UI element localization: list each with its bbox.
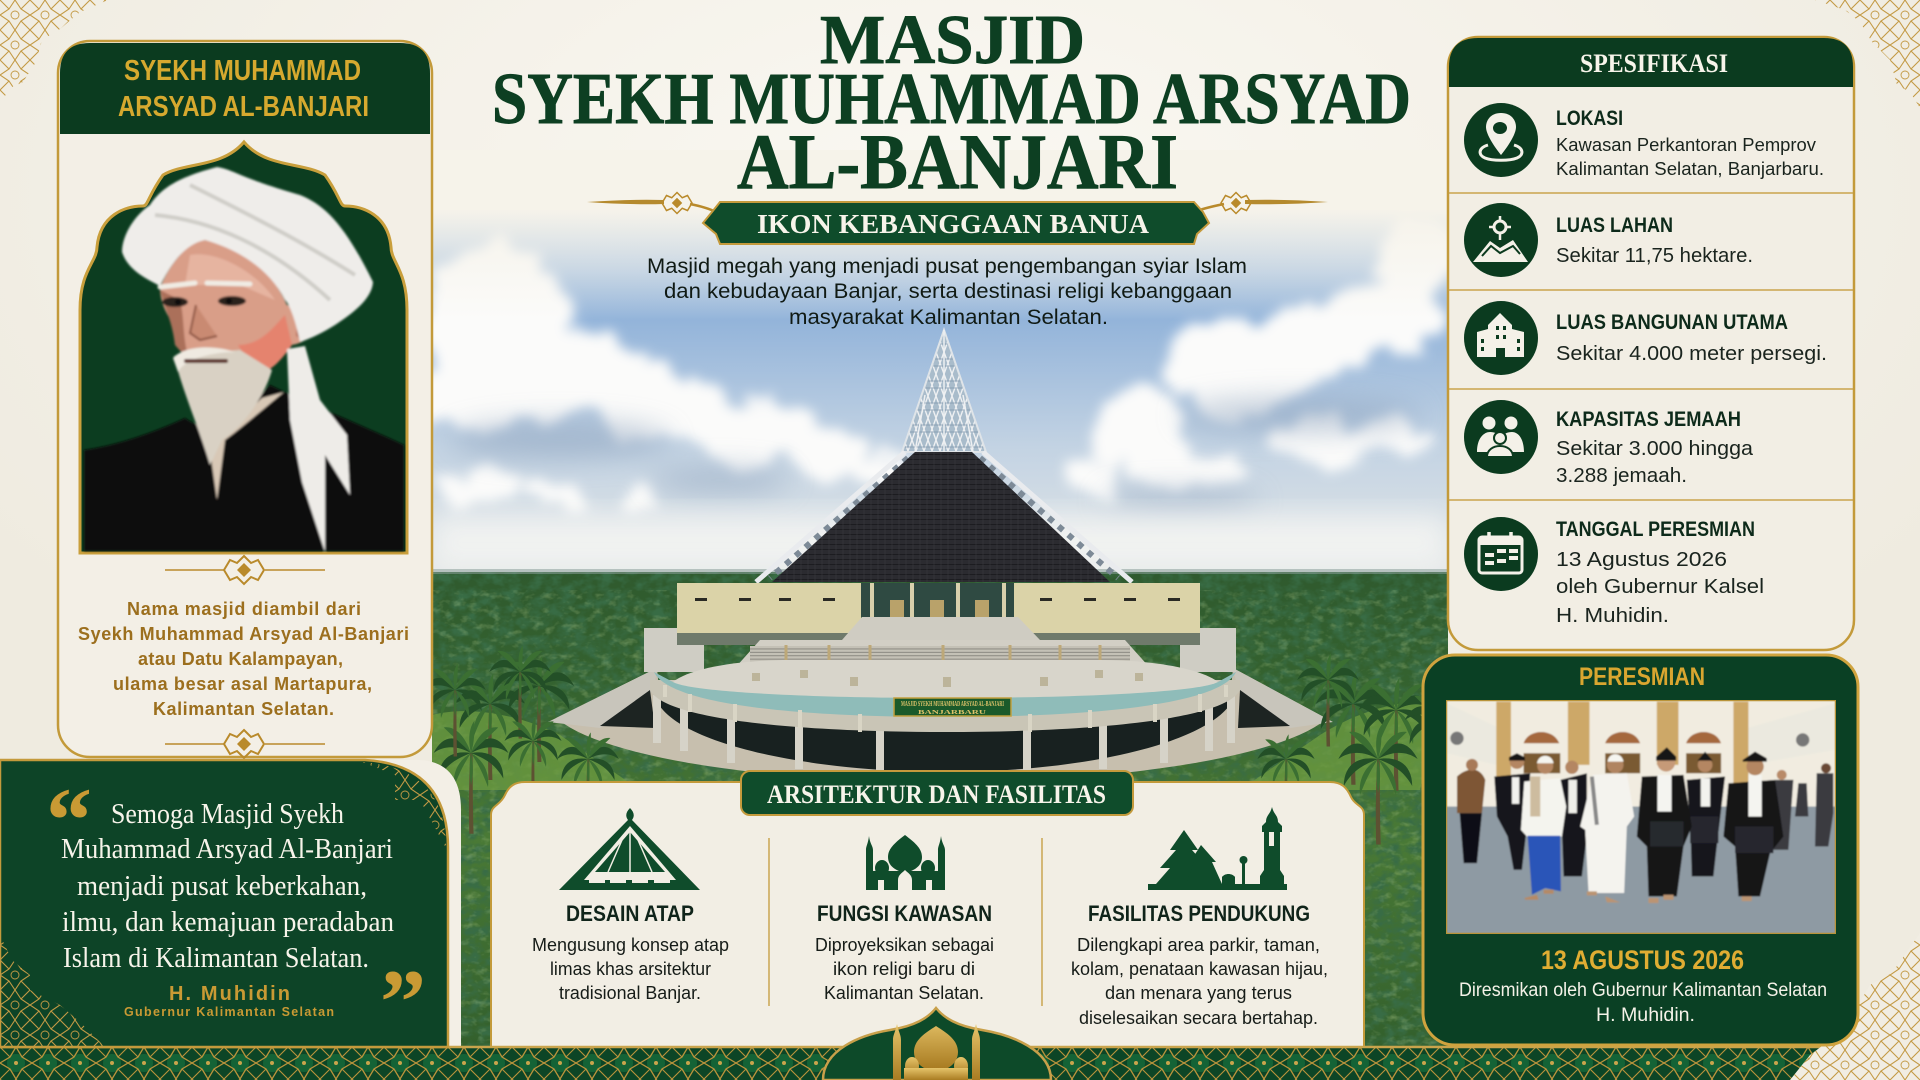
row: Kapasitas Jemaah xyxy=(1464,400,1754,487)
quote text: Semoga Masjid Syekh xyxy=(111,798,344,830)
panel: Spesifikasi xyxy=(1448,37,1854,650)
row: Luas Lahan: LUAS LAHAN xyxy=(1556,214,1673,237)
moustache and mouth xyxy=(173,347,235,372)
caption: ulama besar asal Martapura, xyxy=(113,674,372,694)
row: Kapasitas Jemaah: 3.288 jemaah. xyxy=(1556,465,1687,487)
row: Tanggal Peresmian: TANGGAL PERESMIAN xyxy=(1556,518,1755,541)
decorative corner: bottom right lattice xyxy=(1790,940,1920,1080)
column: Desain Atap: DESAIN ATAP xyxy=(566,901,694,926)
top ornament divider xyxy=(165,556,325,584)
roof xyxy=(756,452,1132,582)
opening quote mark: “ xyxy=(46,769,92,871)
caption xyxy=(78,599,409,719)
under-plaza colonnade xyxy=(654,692,1236,772)
face xyxy=(160,240,316,372)
row: Tanggal Peresmian: 13 Agustus 2026 xyxy=(1556,549,1727,571)
column: Fungsi Kawasan: Diproyeksikan sebagai xyxy=(815,935,994,955)
row: Kapasitas Jemaah: Sekitar 3.000 hingga xyxy=(1556,438,1754,460)
circular plaza xyxy=(650,660,1240,732)
center arch with gold mosque xyxy=(823,1008,1051,1080)
person center official xyxy=(1637,775,1692,896)
icon: gold mosque xyxy=(893,1017,980,1080)
quote text: Muhammad Arsyad Al-Banjari xyxy=(61,833,393,865)
caption: Kalimantan Selatan. xyxy=(153,699,334,719)
person white shirt blue sarong xyxy=(1521,778,1566,836)
section heading ribbon: ARSITEKTUR DAN FASILITAS xyxy=(767,780,1106,809)
column: Desain Atap xyxy=(532,808,729,1003)
subtitle ribbon with gold flourishes xyxy=(587,192,1328,244)
panel: quote backing xyxy=(0,760,461,1047)
spec header xyxy=(1449,38,1853,87)
row: Lokasi: LOKASI xyxy=(1556,107,1623,130)
panel heading: ARSYAD AL-BANJARI xyxy=(118,91,369,123)
side blocks and walls xyxy=(644,583,1236,672)
icon: people group xyxy=(1464,400,1538,474)
bottom ornamental band xyxy=(0,1047,1920,1080)
forest and lawn xyxy=(432,569,1448,1052)
quote text: Islam di Kalimantan Selatan. xyxy=(63,942,369,974)
spec heading: SPESIFIKASI xyxy=(1580,49,1728,78)
row: Kapasitas Jemaah: KAPASITAS JEMAAH xyxy=(1556,408,1741,431)
icon: land area xyxy=(1464,203,1538,277)
row: Lokasi xyxy=(1464,103,1824,179)
plaza name sign xyxy=(894,698,1011,716)
caption: Nama masjid diambil dari xyxy=(127,599,361,619)
panel heading: PERESMIAN xyxy=(1579,663,1705,691)
hero photo: mosque aerial view xyxy=(432,220,1448,1046)
sky with clouds xyxy=(410,150,1459,575)
caption: Syekh Muhammad Arsyad Al-Banjari xyxy=(78,624,409,644)
row: Luas Bangunan Utama: Sekitar 4.000 meter persegi. xyxy=(1556,343,1827,365)
column: Fungsi Kawasan: Kalimantan Selatan. xyxy=(824,983,984,1003)
row: Lokasi: Kalimantan Selatan, Banjarbaru. xyxy=(1556,159,1824,179)
column: Desain Atap: limas khas arsitektur xyxy=(550,959,711,979)
attribution: Gubernur Kalimantan Selatan xyxy=(124,1005,334,1019)
section heading ribbon xyxy=(741,771,1133,815)
row: Tanggal Peresmian xyxy=(1464,517,1764,627)
palm trees xyxy=(424,645,1475,844)
column: Fasilitas Pendukung: Dilengkapi area parkir, taman, xyxy=(1077,935,1320,955)
attribution xyxy=(124,983,334,1019)
row: Luas Lahan: Sekitar 11,75 hektare. xyxy=(1556,245,1753,267)
subtitle ribbon with gold flourishes: IKON KEBANGGAAN BANUA xyxy=(757,209,1150,239)
row: Tanggal Peresmian: oleh Gubernur Kalsel xyxy=(1556,576,1764,598)
panel: Peresmian xyxy=(1423,655,1858,1045)
bottom ornament divider xyxy=(165,730,325,758)
background people xyxy=(1773,773,1833,850)
quote text xyxy=(61,798,394,974)
ring road and ramps xyxy=(548,670,1333,772)
terrace stairs xyxy=(735,617,1150,668)
row: Tanggal Peresmian: H. Muhidin. xyxy=(1556,605,1669,627)
date: 13 AGUSTUS 2026 xyxy=(1541,945,1744,975)
dark jackets rear xyxy=(1494,773,1530,870)
intro description xyxy=(647,255,1247,329)
title: AL-BANJARI xyxy=(737,118,1178,205)
plaza name sign: MASJID SYEKH MUHAMMAD ARSYAD AL-BANJARI xyxy=(901,700,1004,708)
column: Fungsi Kawasan: ikon religi baru di xyxy=(833,959,975,979)
panel: Arsitektur dan Fasilitas xyxy=(491,771,1364,1047)
plaza name sign: BANJARBARU xyxy=(918,710,987,716)
column: Fungsi Kawasan xyxy=(815,825,994,1003)
column: Fungsi Kawasan: FUNGSI KAWASAN xyxy=(817,901,992,926)
robe xyxy=(84,385,404,551)
description xyxy=(1459,980,1827,1026)
column: Fasilitas Pendukung: FASILITAS PENDUKUNG xyxy=(1088,901,1310,926)
quote corner ornament bottom left xyxy=(0,942,103,1047)
person white robe xyxy=(1580,773,1634,893)
person batik xyxy=(1457,769,1485,813)
inauguration photo xyxy=(1447,701,1835,933)
portrait of Syekh Arsyad in arch xyxy=(80,142,407,553)
quote text: menjadi pusat keberkahan, xyxy=(77,870,367,902)
icon: trees and tower xyxy=(1148,807,1287,890)
intro description: dan kebudayaan Banjar, serta destinasi religi kebanggaan xyxy=(664,280,1232,303)
decorative corner: top right lattice xyxy=(1810,0,1920,110)
panel header xyxy=(60,43,430,134)
column: Desain Atap: Mengusung konsep atap xyxy=(532,935,729,955)
quote text: ilmu, dan kemajuan peradaban xyxy=(62,906,394,938)
description: H. Muhidin. xyxy=(1596,1005,1695,1026)
turban tail xyxy=(287,346,350,552)
attribution: H. Muhidin xyxy=(169,983,290,1005)
caption: atau Datu Kalampayan, xyxy=(138,649,343,669)
title: MASJID xyxy=(820,2,1085,79)
panel heading xyxy=(118,55,369,123)
column: Desain Atap: tradisional Banjar. xyxy=(559,983,701,1003)
row: Luas Bangunan Utama xyxy=(1464,301,1827,375)
closing quote mark: ” xyxy=(380,951,426,1053)
spire frame xyxy=(902,330,986,452)
brows and eyes xyxy=(160,283,250,287)
icon: calendar xyxy=(1464,517,1538,591)
intro description: masyarakat Kalimantan Selatan. xyxy=(789,306,1108,329)
panel: quote from H. Muhidin xyxy=(0,760,450,1053)
person right official xyxy=(1723,780,1783,896)
intro description: Masjid megah yang menjadi pusat pengembangan syiar Islam xyxy=(647,255,1247,278)
title: SYEKH MUHAMMAD ARSYAD xyxy=(492,58,1411,139)
title xyxy=(492,2,1411,205)
row: Luas Lahan xyxy=(1464,203,1753,277)
panel heading: SYEKH MUHAMMAD xyxy=(124,55,361,87)
mosque building xyxy=(547,330,1337,782)
icon: pyramid roof xyxy=(559,808,700,890)
quote corner ornament top right xyxy=(363,762,446,846)
turban xyxy=(122,167,373,342)
column: Fasilitas Pendukung xyxy=(1071,807,1328,1028)
column: Fasilitas Pendukung: dan menara yang terus xyxy=(1105,983,1292,1003)
beard xyxy=(174,350,272,465)
column: Fasilitas Pendukung: kolam, penataan kawasan hijau, xyxy=(1071,959,1328,979)
panel: Syekh Muhammad Arsyad Al-Banjari profile xyxy=(58,41,432,758)
row: Luas Bangunan Utama: LUAS BANGUNAN UTAMA xyxy=(1556,311,1788,334)
icon: location pin xyxy=(1464,103,1538,177)
decorative corner: top left lattice xyxy=(0,0,106,96)
icon: buildings xyxy=(1464,301,1538,375)
column: Fasilitas Pendukung: diselesaikan secara bertahap. xyxy=(1079,1008,1318,1028)
description: Diresmikan oleh Gubernur Kalimantan Selatan xyxy=(1459,980,1827,1001)
icon: mosque silhouette xyxy=(866,825,945,890)
row: Lokasi: Kawasan Perkantoran Pemprov xyxy=(1556,135,1816,155)
